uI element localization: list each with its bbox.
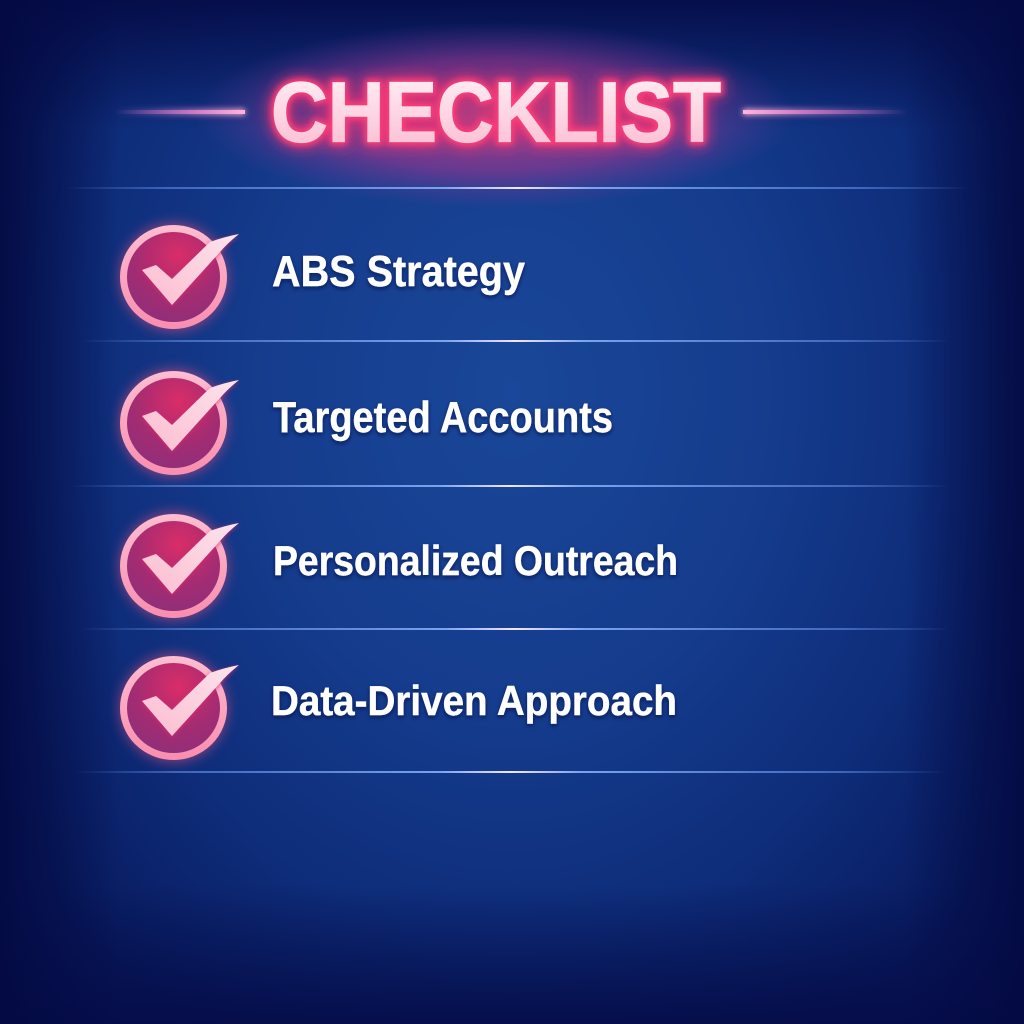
divider 2: [70, 485, 950, 487]
label 2: Targeted Accounts: [273, 393, 613, 442]
title: CHECKLIST: [271, 66, 721, 160]
label 1: ABS Strategy: [272, 247, 525, 296]
label 4: Data-Driven Approach: [271, 677, 677, 724]
divider 3: [80, 628, 950, 630]
icon: check badge 4: [120, 654, 239, 762]
title: CHECKLIST: [271, 66, 721, 160]
checklist item 2: [120, 369, 613, 477]
checklist item 3: [120, 512, 678, 620]
title dash: left: [115, 109, 245, 115]
icon: check badge 3: [120, 512, 239, 620]
checklist item 1: [120, 223, 525, 331]
label 3: Personalized Outreach: [273, 537, 678, 584]
title glow backdrop: [100, 0, 900, 240]
divider top: [65, 187, 970, 189]
title dash: right: [743, 109, 908, 115]
divider 1: [80, 340, 950, 342]
title: CHECKLIST: [271, 66, 721, 160]
icon: check badge 2: [120, 369, 239, 477]
icon: check badge 1: [120, 223, 239, 331]
checklist item 4: [120, 654, 677, 762]
divider 4: [75, 771, 945, 773]
